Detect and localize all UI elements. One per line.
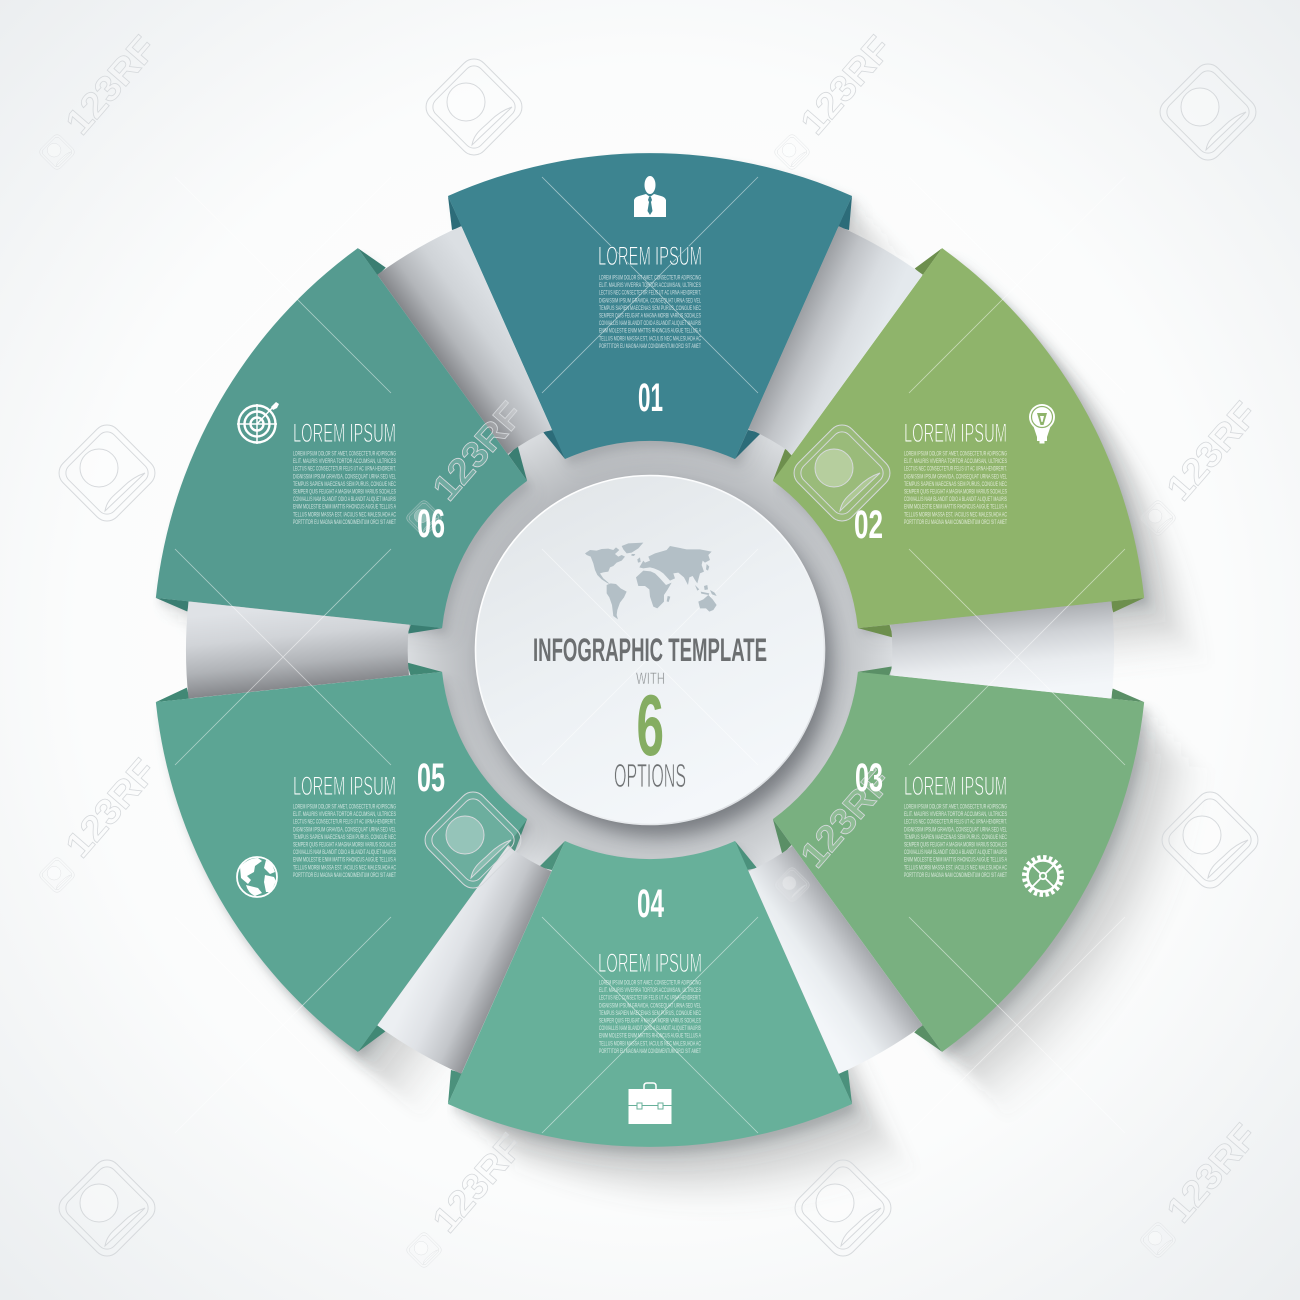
- text block: option 01: PORTTITOR EU MAGNA NAM CONDIMENTUM ORCI SIT AMET: [599, 343, 701, 350]
- text block: option 02: TELLUS MORBI MASSA EST, IACULIS NEC MALESUADA AC: [904, 511, 1007, 518]
- inner grey ring: [406, 406, 894, 894]
- text block: option 05: DIGNISSIM IPSUM GRAVIDA, CONSEQUAT URNA SED VEL: [293, 826, 396, 833]
- text block: option 01: DIGNISSIM IPSUM GRAVIDA, CONSEQUAT URNA SED VEL: [599, 297, 701, 304]
- big number 6: 6: [636, 678, 664, 774]
- text block: option 02: ENIM MOLESTIE ENIM MATTIS RHONCUS AUGUE TELLUS A: [904, 504, 1007, 511]
- icon: world map: [585, 543, 717, 619]
- text block: option 04: LOREM IPSUM DOLOR SIT AMET, CONSECTETUR ADIPISCING: [599, 980, 701, 986]
- text block: option 06: LOREM IPSUM DOLOR SIT AMET, CONSECTETUR ADIPISCING: [293, 450, 396, 458]
- panel: sector 02: [714, 227, 1181, 729]
- text block: option 06: PORTTITOR EU MAGNA NAM CONDIMENTUM ORCI SIT AMET: [293, 519, 396, 526]
- paper strips between the sectors: [186, 224, 1114, 1076]
- panel: sector 03: [714, 571, 1181, 1073]
- text block: option 01: 01: [638, 376, 663, 420]
- long diagonal drop shadow of the wheel: [125, 161, 1245, 1213]
- icon: globe: [237, 857, 277, 897]
- text block: option 02: LECTUS NEC CONSECTETUR FELIS UT AC URNA HENDRERIT.: [904, 466, 1007, 473]
- text block: option 04: PORTTITOR EU MAGNA NAM CONDIMENTUM ORCI SIT AMET: [599, 1048, 701, 1055]
- stock watermark 123RF marks: 123RF: [792, 28, 899, 142]
- text block: option 01: [598, 241, 702, 420]
- label: with: WITH: [636, 669, 665, 688]
- text block: option 03: DIGNISSIM IPSUM GRAVIDA, CONSEQUAT URNA SED VEL: [904, 826, 1007, 833]
- icon: briefcase: [628, 1083, 672, 1124]
- stock watermark 123RF marks: 123RF: [424, 394, 531, 508]
- text block: option 02: LOREM IPSUM DOLOR SIT AMET, CONSECTETUR ADIPISCING: [904, 450, 1007, 458]
- text block: option 06: [293, 418, 445, 546]
- text block: option 03: LOREM IPSUM: [904, 771, 1007, 801]
- text block: option 06: CONVALLIS NAM BLANDIT ODIO A BLANDIT ALIQUET MAURIS: [293, 496, 396, 503]
- heading: infographic template: INFOGRAPHIC TEMPLATE: [533, 632, 767, 668]
- text block: option 06: ENIM MOLESTIE ENIM MATTIS RHONCUS AUGUE TELLUS A: [293, 504, 396, 511]
- text block: option 04: ENIM MOLESTIE ENIM MATTIS RHONCUS AUGUE TELLUS A: [599, 1033, 701, 1040]
- text block: option 05: SEMPER QUIS FEUGIAT A MAGNA MORBI VARIUS SODALES: [293, 842, 396, 848]
- text block: option 03: PORTTITOR EU MAGNA NAM CONDIMENTUM ORCI SIT AMET: [904, 872, 1007, 879]
- text block: option 05: [293, 756, 445, 879]
- text block: option 06: LOREM IPSUM: [293, 418, 396, 448]
- stock watermark 123RF marks: 123RF: [792, 761, 899, 875]
- text block: option 01: LECTUS NEC CONSECTETUR FELIS UT AC URNA HENDRERIT.: [599, 290, 701, 297]
- text block: option 04: TEMPUS SAPIEN MAECENAS SEM PURUS, CONGUE NEC: [599, 1010, 701, 1017]
- text block: option 04: LOREM IPSUM: [598, 948, 702, 978]
- central disc: [476, 476, 824, 824]
- icon: target with arrow: [237, 402, 279, 444]
- text block: option 04: 04: [637, 882, 664, 926]
- text block: option 04: CONVALLIS NAM BLANDIT ODIO A BLANDIT ALIQUET MAURIS: [599, 1025, 701, 1032]
- panel: sector 01: [448, 153, 852, 459]
- text block: option 02: CONVALLIS NAM BLANDIT ODIO A BLANDIT ALIQUET MAURIS: [904, 496, 1007, 503]
- text block: option 03: TELLUS MORBI MASSA EST, IACULIS NEC MALESUADA AC: [904, 864, 1007, 871]
- text block: option 01: ENIM MOLESTIE ENIM MATTIS RHONCUS AUGUE TELLUS A: [599, 328, 701, 335]
- text block: option 02: LOREM IPSUM: [904, 418, 1007, 448]
- text block: option 04: [598, 882, 702, 1055]
- text block: option 04: ELIT. MAURIS VIVERRA TORTOR ACCUMSAN, ULTRICES: [599, 987, 701, 994]
- text block: option 06: TEMPUS SAPIEN MAECENAS SEM PURUS, CONGUE NEC: [293, 481, 396, 488]
- text block: option 03: 03: [855, 756, 883, 800]
- icon: gear: [1024, 858, 1062, 894]
- text block: option 06: SEMPER QUIS FEUGIAT A MAGNA MORBI VARIUS SODALES: [293, 488, 396, 496]
- text block: option 05: TEMPUS SAPIEN MAECENAS SEM PURUS, CONGUE NEC: [293, 834, 396, 841]
- text: OPTIONS: [614, 757, 686, 794]
- text block: option 01: LOREM IPSUM DOLOR SIT AMET, CONSECTETUR ADIPISCING: [599, 274, 701, 282]
- text block: option 03: LECTUS NEC CONSECTETUR FELIS UT AC URNA HENDRERIT.: [904, 819, 1007, 826]
- text block: option 01: ELIT. MAURIS VIVERRA TORTOR ACCUMSAN, ULTRICES: [599, 282, 701, 289]
- text block: option 02: 02: [854, 503, 883, 547]
- text block: option 01: TEMPUS SAPIEN MAECENAS SEM PURUS, CONGUE NEC: [599, 305, 701, 312]
- icon: person: [634, 176, 666, 217]
- text block: option 03: CONVALLIS NAM BLANDIT ODIO A BLANDIT ALIQUET MAURIS: [904, 849, 1007, 856]
- text block: option 06: DIGNISSIM IPSUM GRAVIDA, CONSEQUAT URNA SED VEL: [293, 473, 396, 480]
- text block: option 05: PORTTITOR EU MAGNA NAM CONDIMENTUM ORCI SIT AMET: [293, 872, 396, 879]
- text block: option 02: TEMPUS SAPIEN MAECENAS SEM PURUS, CONGUE NEC: [904, 481, 1007, 488]
- text block: option 01: CONVALLIS NAM BLANDIT ODIO A BLANDIT ALIQUET MAURIS: [599, 320, 701, 327]
- text block: option 01: LOREM IPSUM: [598, 241, 702, 271]
- text block: option 02: SEMPER QUIS FEUGIAT A MAGNA MORBI VARIUS SODALES: [904, 488, 1007, 496]
- stock watermark 123RF marks: 123RF: [57, 751, 164, 865]
- text block: option 02: PORTTITOR EU MAGNA NAM CONDIMENTUM ORCI SIT AMET: [904, 519, 1007, 526]
- text block: option 02: DIGNISSIM IPSUM GRAVIDA, CONSEQUAT URNA SED VEL: [904, 473, 1007, 480]
- panel: sector 04: [448, 841, 852, 1147]
- text block: option 06: 06: [417, 502, 445, 546]
- text block: option 04: SEMPER QUIS FEUGIAT A MAGNA MORBI VARIUS SODALES: [599, 1018, 701, 1024]
- text block: option 02: ELIT. MAURIS VIVERRA TORTOR ACCUMSAN, ULTRICES: [904, 458, 1007, 465]
- text block: option 04: DIGNISSIM IPSUM GRAVIDA, CONSEQUAT URNA SED VEL: [599, 1002, 701, 1009]
- text block: option 03: SEMPER QUIS FEUGIAT A MAGNA MORBI VARIUS SODALES: [904, 842, 1007, 848]
- text block: option 05: LECTUS NEC CONSECTETUR FELIS UT AC URNA HENDRERIT.: [293, 819, 396, 826]
- central disc shadow: [487, 492, 831, 836]
- stock watermark cross lines: [175, 177, 1125, 1133]
- text block: option 06: TELLUS MORBI MASSA EST, IACULIS NEC MALESUADA AC: [293, 511, 396, 518]
- stock watermark 123RF marks: 123RF: [1158, 1116, 1265, 1230]
- text block: option 03: LOREM IPSUM DOLOR SIT AMET, CONSECTETUR ADIPISCING: [904, 804, 1007, 810]
- text block: option 03: ELIT. MAURIS VIVERRA TORTOR ACCUMSAN, ULTRICES: [904, 811, 1007, 818]
- text block: option 05: CONVALLIS NAM BLANDIT ODIO A BLANDIT ALIQUET MAURIS: [293, 849, 396, 856]
- icon: light bulb: [1029, 404, 1055, 444]
- text block: option 04: LECTUS NEC CONSECTETUR FELIS UT AC URNA HENDRERIT.: [599, 995, 701, 1002]
- text block: option 02: [854, 418, 1007, 547]
- panel: sector 06: [119, 227, 586, 729]
- contact shadow of the sectors: [123, 159, 1191, 1160]
- text block: option 04: TELLUS MORBI MASSA EST, IACULIS NEC MALESUADA AC: [599, 1040, 701, 1047]
- text block: option 03: ENIM MOLESTIE ENIM MATTIS RHONCUS AUGUE TELLUS A: [904, 857, 1007, 864]
- stock watermark 123RF marks: 123RF: [1158, 394, 1265, 508]
- stock watermark 123RF marks: 123RF: [57, 28, 164, 142]
- text block: option 01: SEMPER QUIS FEUGIAT A MAGNA MORBI VARIUS SODALES: [599, 312, 701, 320]
- text block: option 05: LOREM IPSUM: [293, 771, 396, 801]
- text block: option 05: 05: [417, 756, 445, 800]
- text block: option 06: ELIT. MAURIS VIVERRA TORTOR ACCUMSAN, ULTRICES: [293, 458, 396, 465]
- text block: option 05: TELLUS MORBI MASSA EST, IACULIS NEC MALESUADA AC: [293, 864, 396, 871]
- stock watermark 123RF marks: 123RF: [424, 1126, 531, 1240]
- text block: option 01: TELLUS MORBI MASSA EST, IACULIS NEC MALESUADA AC: [599, 335, 701, 342]
- text block: option 06: LECTUS NEC CONSECTETUR FELIS UT AC URNA HENDRERIT.: [293, 466, 396, 473]
- text block: option 03: TEMPUS SAPIEN MAECENAS SEM PURUS, CONGUE NEC: [904, 834, 1007, 841]
- text block: option 05: ENIM MOLESTIE ENIM MATTIS RHONCUS AUGUE TELLUS A: [293, 857, 396, 864]
- panel: sector 05: [119, 571, 586, 1073]
- text block: option 03: [855, 756, 1007, 879]
- text block: option 05: LOREM IPSUM DOLOR SIT AMET, CONSECTETUR ADIPISCING: [293, 804, 396, 810]
- text block: option 05: ELIT. MAURIS VIVERRA TORTOR ACCUMSAN, ULTRICES: [293, 811, 396, 818]
